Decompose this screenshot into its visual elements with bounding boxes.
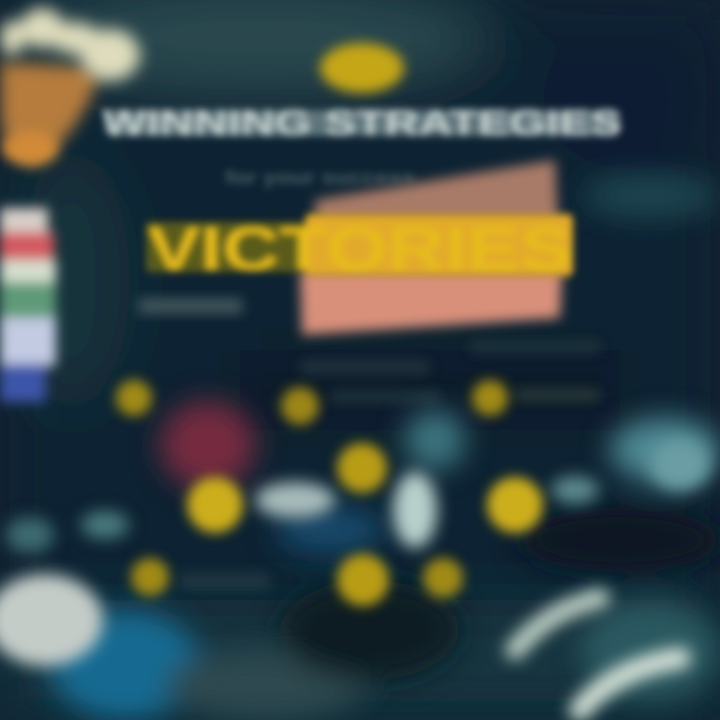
icon: yellow dot 8 xyxy=(337,554,389,606)
icon: striped flag xyxy=(0,208,56,402)
text block: left caption xyxy=(138,298,243,314)
icon: yellow dot 5 xyxy=(187,477,243,533)
icon: yellow dot 2 xyxy=(281,387,319,425)
headline: VICTORIES xyxy=(148,215,572,284)
badge: top pill xyxy=(320,43,404,93)
icon: yellow dot 1 xyxy=(116,380,152,416)
icon: yellow dot 3 xyxy=(472,380,508,416)
title: WINNING STRATEGIES xyxy=(102,102,622,143)
icon: yellow dot 7 xyxy=(131,558,169,596)
icon: yellow dot 9 xyxy=(423,558,463,598)
icon: yellow dot 4 xyxy=(337,443,387,493)
icon: yellow dot 6 xyxy=(487,477,543,533)
panel: dark text rows xyxy=(180,340,600,590)
panel: pink highlight xyxy=(300,160,562,335)
panel: right glow bar xyxy=(582,174,718,218)
subtitle: for your success xyxy=(225,168,415,189)
icon: crown badge xyxy=(0,8,140,165)
illustration: waves and clouds xyxy=(0,410,720,720)
shape: crimson circle xyxy=(160,401,256,489)
